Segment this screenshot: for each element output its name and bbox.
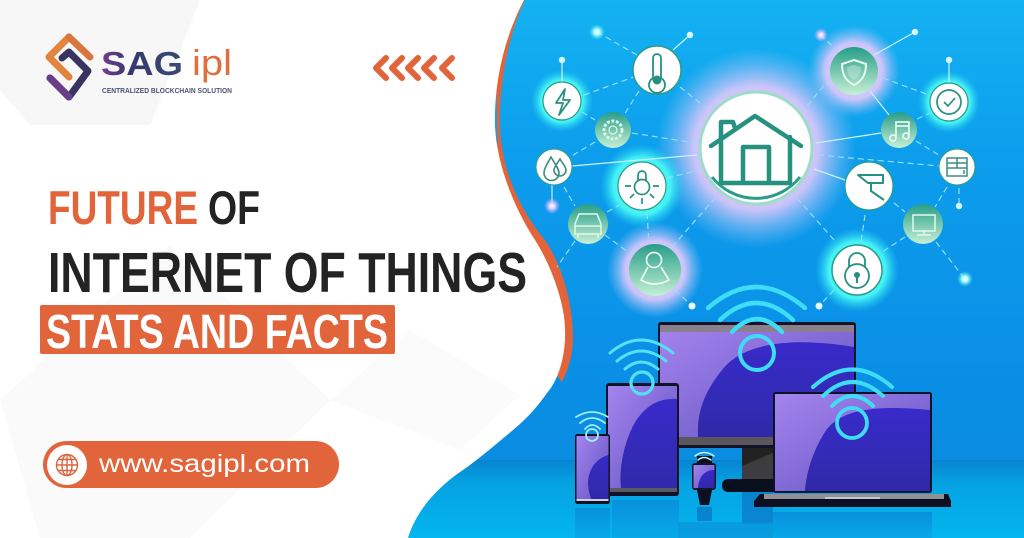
orange curved edge: [495, 0, 573, 382]
wifi signal: tablet: [610, 340, 673, 394]
wifi signal: watch: [695, 452, 714, 460]
wifi signal: phone: [576, 412, 608, 441]
reflective floor: [0, 460, 1024, 538]
icon: clock: [930, 83, 968, 121]
icon: globe: [47, 445, 87, 485]
website pill: [43, 441, 339, 488]
chevron arrows: [376, 58, 452, 78]
logo mark: [49, 37, 90, 97]
tablet: [606, 383, 679, 496]
laptop: [754, 392, 951, 507]
icon: central house: [700, 92, 812, 204]
FUTURE: FUTURE: [48, 181, 198, 234]
logo wordmark: SAG: [101, 45, 183, 82]
subtitle banner: STATS AND FACTS: [46, 306, 388, 359]
icon: light bulb: [618, 162, 666, 210]
monitor stand: [742, 447, 775, 481]
logo: SAG ipl: ipl: [192, 42, 232, 83]
monitor screen: [658, 322, 856, 448]
icon: gear: [595, 112, 631, 148]
icon: lightning bolt: [543, 82, 581, 120]
icon: window blinds: [939, 149, 975, 185]
network end dots: [544, 24, 973, 310]
logo tagline: CENTRALIZED BLOCKCHAIN SOLUTION: [102, 86, 232, 95]
glow halos: [531, 25, 980, 318]
network connection lines: [552, 32, 965, 306]
icon: music note: [881, 112, 917, 148]
title line 1: [48, 181, 260, 234]
title line 2: INTERNET OF THINGS: [48, 241, 527, 305]
icon: car: [568, 204, 608, 244]
OF: OF: [208, 181, 260, 234]
phone: [575, 434, 610, 504]
icon: padlock: [832, 245, 882, 295]
subtle grey background facets: [0, 0, 520, 538]
icon: person: [629, 244, 681, 296]
wifi signal: monitor: [708, 287, 805, 370]
laptop keyboard base: [754, 494, 951, 507]
icon: shield: [830, 47, 878, 95]
wifi signal: laptop: [813, 370, 892, 438]
floor reflections: [575, 492, 932, 538]
icon: security camera: [845, 162, 893, 210]
smartwatch: [692, 456, 716, 505]
website url: www.sagipl.com: [98, 450, 310, 478]
white left panel: [0, 0, 565, 538]
icon: water drops: [536, 149, 572, 185]
icon: computer monitor: [903, 204, 943, 244]
logo: SAG ipl: [49, 37, 232, 97]
desktop monitor: [658, 322, 856, 492]
icon: thermometer: [633, 46, 681, 94]
